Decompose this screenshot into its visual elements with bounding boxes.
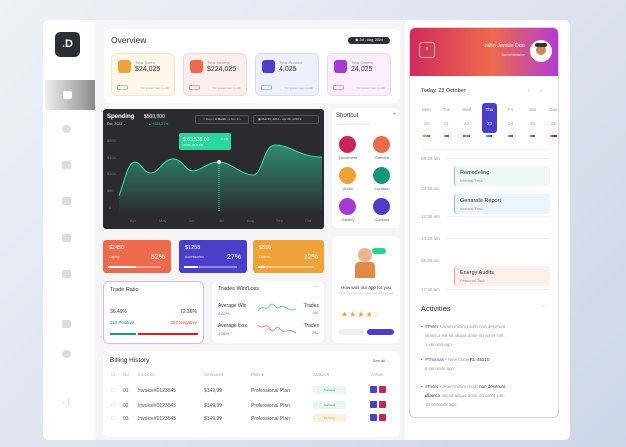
panel: feedback: How was our app for you	[341, 285, 391, 290]
panel: billing history: 03	[123, 416, 129, 422]
week days: Sun	[549, 107, 558, 112]
panel: billing history: ☐	[111, 416, 115, 422]
panel: trade ratio: Trade Ratio	[110, 287, 139, 293]
stat: total orders: Total Orders	[351, 60, 373, 65]
panel: trades win/loss	[212, 281, 324, 343]
card: accessories	[179, 240, 247, 273]
week days: 23	[487, 121, 492, 126]
stat: total income: Compared last month	[212, 86, 241, 90]
card: laptop: $2450	[109, 245, 124, 251]
stat: total product: Compared last month	[284, 86, 313, 90]
chart header: Spending	[107, 114, 134, 120]
panel: billing history: 02	[123, 403, 129, 409]
chart: spending: ▣ Mar 26, 2016 - Apr 26, 2016 ▾	[258, 117, 301, 121]
panel: billing history: Pending	[324, 416, 335, 420]
chart: spending: $300	[107, 171, 117, 176]
week days: 24	[508, 121, 513, 126]
panel: trades win/loss: 140	[312, 311, 318, 315]
panel: billing history: ☐	[111, 388, 115, 394]
week days: Fri	[508, 107, 513, 112]
panel: overview	[104, 29, 400, 103]
panel: billing history: Ammount	[204, 372, 223, 377]
card: others: Others	[259, 255, 270, 259]
panel: billing history: ☐	[111, 372, 115, 377]
text: ullamco est sit aliqua dolor do amet sint.	[425, 393, 505, 398]
panel: trades win/loss: Trades	[304, 303, 319, 309]
panel: shortcut: Camera	[375, 155, 389, 160]
chart: spending: 7 Days | 1 Month | 3 Months	[203, 117, 241, 121]
panel: trade ratio: 72.36%	[180, 309, 197, 315]
tooltip: $ 63,535.00	[183, 137, 209, 143]
panel: shortcut: Location	[374, 186, 390, 191]
panel: billing history	[103, 351, 400, 437]
panel: billing history: Billing History	[110, 357, 149, 364]
week days: Tue	[443, 107, 450, 112]
activity list: 1 second ago	[425, 342, 452, 347]
stat: total income: $224,025	[207, 66, 236, 73]
activity list: • #Peter • Amet minim mollit non deserunt	[421, 324, 505, 329]
week days: 25	[530, 121, 535, 126]
chart: spending: $500	[107, 138, 117, 143]
panel: trade ratio: 257 Negative	[170, 320, 197, 325]
panel: billing history: No	[123, 372, 129, 377]
text: 12:30 am	[421, 214, 440, 219]
panel: billing history: Invoice#0123545	[138, 416, 176, 422]
text: 15:30 am	[421, 258, 440, 263]
panel: billing history: Invoice#0123545	[138, 403, 176, 409]
event: generate report	[454, 194, 550, 214]
date badge	[348, 37, 390, 44]
card: accessories: 27%	[227, 254, 241, 261]
card: others	[253, 240, 324, 273]
chart: spending: Jun	[188, 218, 194, 223]
activities heading: Activities	[421, 304, 451, 313]
week days: 22	[464, 121, 469, 126]
chart: spending: Jul	[219, 218, 224, 223]
week days: 21	[444, 121, 449, 126]
text: 10:30 am	[421, 186, 440, 191]
stat: total orders	[327, 53, 391, 96]
panel: feedback	[332, 236, 400, 343]
panel: billing history: Invoice#0123545	[138, 388, 176, 394]
panel: trade ratio: 36.49%	[110, 309, 127, 315]
card: others: $556	[259, 245, 271, 251]
panel: shortcut: Shortcut	[336, 113, 358, 119]
text: 8 seconds ago	[425, 366, 454, 371]
panel: billing history: ☐	[111, 403, 115, 409]
profile header: ♀	[424, 46, 430, 53]
panel: shortcut: +	[392, 112, 396, 118]
text: 17:30 am	[421, 287, 440, 292]
panel: trades win/loss: Trades Win/Loss	[218, 286, 259, 292]
activity list: ullamco est sit aliqua dolor do amet sint.	[425, 333, 505, 338]
event: energy audits: Personal Task	[460, 278, 485, 283]
chart: spending: Oct, 2023 ⌄	[107, 122, 126, 126]
panel: trades win/loss: 1.26%	[218, 331, 229, 336]
chart: spending	[103, 109, 324, 229]
stat: total orders: Compared last month	[356, 86, 385, 90]
week days: Sat	[529, 107, 536, 112]
main container	[43, 20, 570, 440]
card: accessories: $1258	[185, 245, 200, 251]
profile header: Administrator	[501, 52, 525, 57]
week days: Mon	[422, 107, 431, 112]
panel: trades win/loss: 4.62%	[218, 311, 229, 316]
panel: billing history: Plan ▾	[251, 372, 264, 377]
event: remodeling: Remodeling	[460, 170, 489, 176]
logo	[55, 32, 80, 57]
stat: total income	[183, 53, 247, 96]
event: generate report: Internal Task	[460, 206, 483, 211]
panel: billing history: Success	[324, 403, 335, 407]
panel: billing history: 01	[123, 388, 129, 394]
chart: spending: Sep	[276, 218, 284, 223]
panel: billing history: Invoices	[138, 372, 155, 377]
panel: shortcut: Document	[339, 155, 357, 160]
chart: spending: Aug	[247, 218, 254, 223]
tooltip	[179, 133, 231, 150]
tooltip: 20 Nov, 09:45 PM	[183, 144, 203, 147]
panel: trades win/loss: Average Win	[218, 303, 247, 309]
panel: trades win/loss: Average loss	[218, 323, 247, 329]
week days: Wed	[462, 107, 471, 112]
panel: shortcut: Contact	[375, 217, 389, 222]
week days: Thu	[486, 107, 493, 112]
profile header	[410, 28, 560, 76]
text: ‹ ›	[528, 88, 542, 94]
chart: spending: 0	[109, 205, 112, 210]
panel: right calendar	[409, 27, 559, 418]
chart: spending: ▲ +235,21%	[148, 122, 168, 126]
illustration	[355, 248, 386, 278]
chart: spending: $50	[107, 188, 114, 193]
event: remodeling: Internal Task	[460, 178, 483, 183]
event: remodeling	[454, 166, 550, 186]
stat: total product: 4,025	[279, 66, 297, 73]
text: 10 seconds ago	[425, 402, 457, 407]
week days: 20	[424, 121, 429, 126]
content background	[95, 20, 405, 440]
panel: shortcut	[332, 108, 400, 228]
chart: spending: $500,000	[144, 114, 165, 120]
panel: shortcut: Lorem ipsum is simply dummy	[336, 123, 370, 126]
chart: spending: May	[159, 218, 167, 223]
card: laptop	[103, 240, 171, 273]
panel: trade ratio	[103, 281, 204, 344]
stat: total product	[255, 53, 319, 96]
date header: Today, 23 October	[421, 88, 466, 94]
panel: billing history: $149,99	[204, 388, 222, 394]
stat: total orders: 24,025	[351, 66, 372, 73]
chart: spending: Apr	[130, 218, 137, 223]
text: • #Peter • Amet minim mollit non deserunt	[421, 384, 505, 389]
active nav: home	[45, 80, 95, 110]
stat: total sales	[111, 53, 175, 96]
stat: total product: Total Product	[279, 60, 302, 65]
profile header: John James Doe	[484, 43, 525, 49]
stat: total sales: $24,025	[135, 66, 160, 73]
text: ←|	[61, 399, 70, 406]
card: laptop: Laptop	[109, 255, 120, 259]
activity list	[421, 324, 506, 347]
panel: billing history: Status ▾	[313, 372, 329, 377]
panel: billing history: $149,99	[204, 403, 222, 409]
panel: billing history: Success	[324, 388, 335, 392]
chart: spending: $400	[107, 155, 117, 160]
text: ···	[541, 304, 546, 310]
card: accessories: Accessories	[185, 255, 204, 259]
panel: billing history: Professional Plan	[251, 416, 290, 422]
date badge: ▣ Jul - Aug, 2024	[355, 38, 383, 42]
overview title: Overview	[111, 35, 146, 45]
event: energy audits	[454, 266, 550, 286]
panel: feedback: Lorem ipsum is simply dummy text of the printing	[339, 292, 393, 295]
panel: trades win/loss: Trades	[304, 323, 319, 329]
week days	[422, 103, 558, 137]
tooltip: ↗ 4%	[220, 137, 228, 141]
stars: ★★★★☆	[341, 310, 382, 319]
panel: billing history: Professional Plan	[251, 403, 290, 409]
chart: spending: Oct	[305, 218, 312, 223]
card: others: 12%	[304, 254, 318, 261]
panel: trade ratio: 113 Positive	[110, 320, 134, 325]
panel: trades win/loss: ···	[313, 284, 319, 290]
panel: shortcut: Gallery	[342, 217, 354, 222]
stat: total sales: Total Sales	[135, 60, 155, 65]
panel: billing history: Professional Plan	[251, 388, 290, 394]
panel: billing history: See all →	[373, 358, 390, 363]
panel: trades win/loss: 291	[312, 331, 318, 335]
text: • #Thomas • New OrderRL-45210	[421, 357, 489, 362]
schedule times: 09:30 am	[421, 156, 440, 161]
panel: billing history: $149,99	[204, 416, 222, 422]
logo: .D	[62, 38, 73, 50]
week days: 26	[551, 121, 556, 126]
sidebar	[45, 32, 95, 110]
event: energy audits: Energy Audits	[460, 270, 494, 276]
stat: total income: Total Income	[207, 60, 230, 65]
panel: billing history: Action	[371, 372, 384, 377]
nav icons	[62, 125, 71, 133]
panel: shortcut: Audio	[343, 186, 353, 191]
stat: total sales: Compared last month	[140, 86, 169, 90]
card: laptop: 52%	[151, 254, 165, 261]
event: generate report: Genarate Report	[460, 198, 501, 204]
text: 14:30 am	[421, 236, 440, 241]
